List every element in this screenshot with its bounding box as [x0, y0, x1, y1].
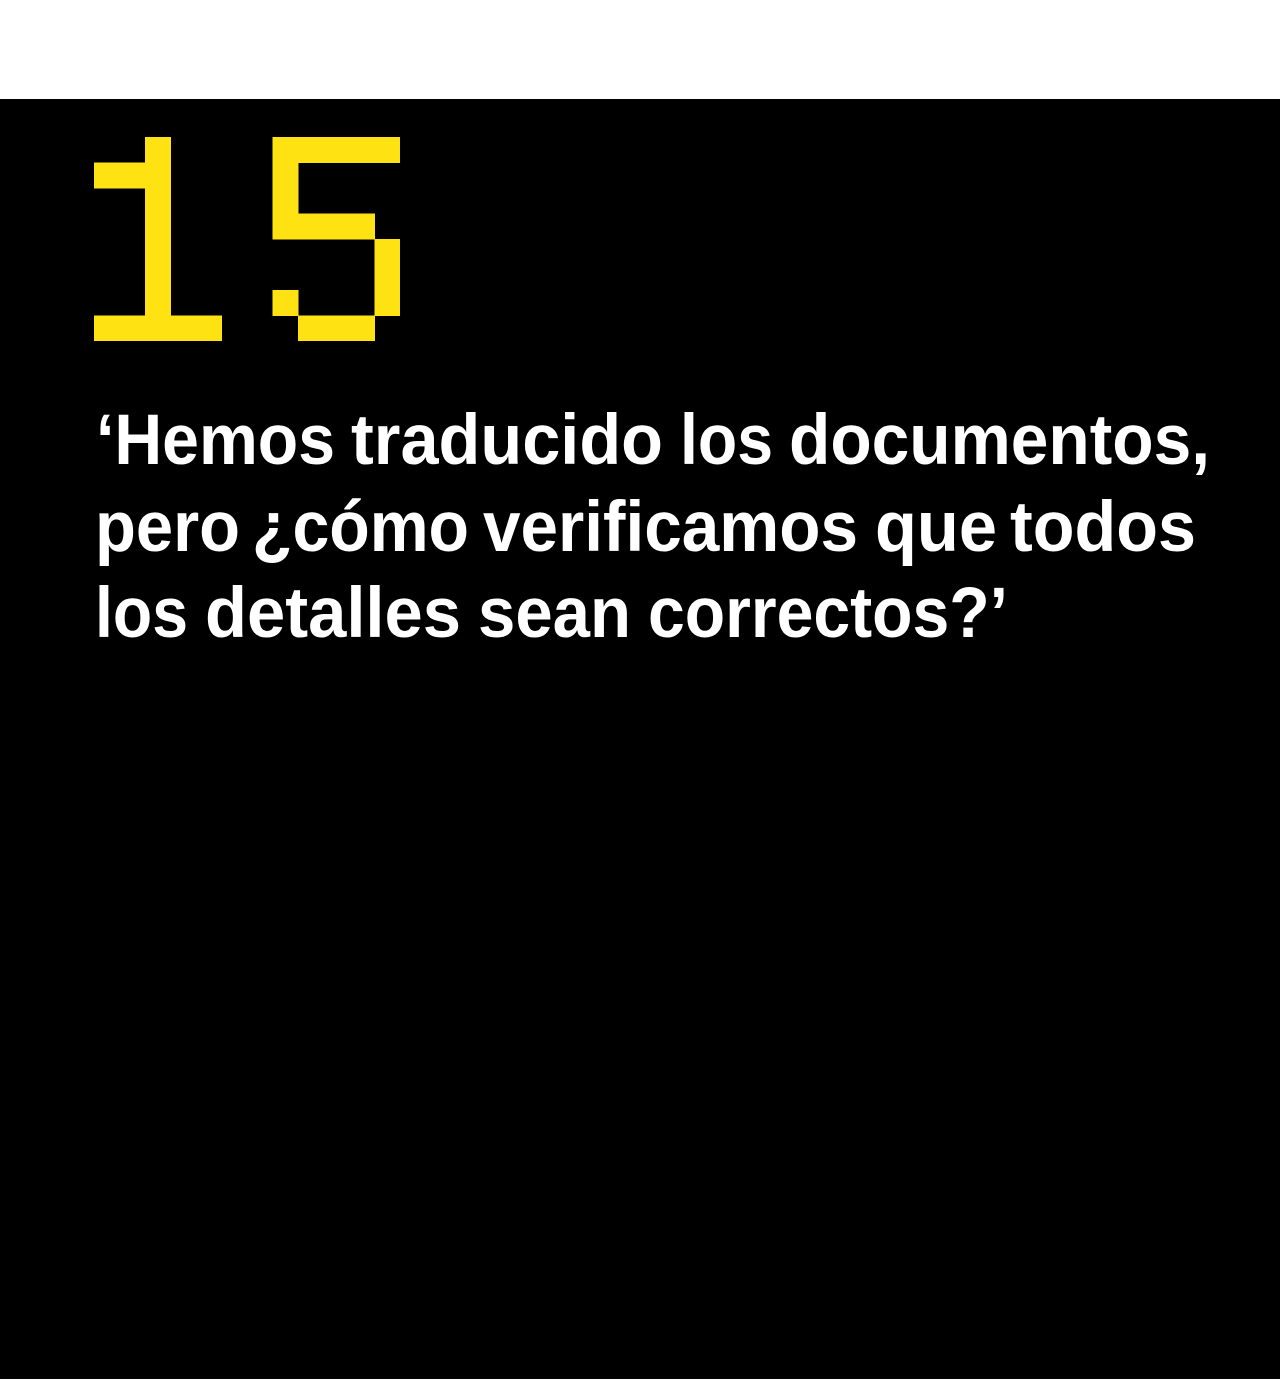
big number 15: 1	[57, 84, 236, 435]
headline line 1: los	[680, 401, 773, 480]
headline line 2: que	[875, 488, 997, 567]
big number 15	[94, 137, 400, 341]
headline line 1: ‘Hemos	[96, 401, 335, 480]
headline line 1: documentos,	[789, 401, 1210, 480]
big number 15: 5	[243, 84, 422, 435]
headline line 2: pero	[95, 488, 240, 567]
headline line 1	[96, 401, 1210, 480]
headline line 2	[95, 488, 1196, 567]
headline line 2: todos	[1010, 488, 1196, 567]
headline line 3: detalles	[205, 574, 461, 653]
headline line 2: ¿cómo	[252, 488, 469, 567]
headline line 3: correctos?’	[648, 574, 1008, 653]
headline quote	[95, 401, 1210, 653]
headline line 2: verificamos	[483, 488, 858, 567]
headline line 3: los	[95, 574, 188, 653]
headline line 1: traducido	[351, 401, 663, 480]
headline line 3: sean	[478, 574, 631, 653]
headline line 3	[95, 574, 1008, 653]
